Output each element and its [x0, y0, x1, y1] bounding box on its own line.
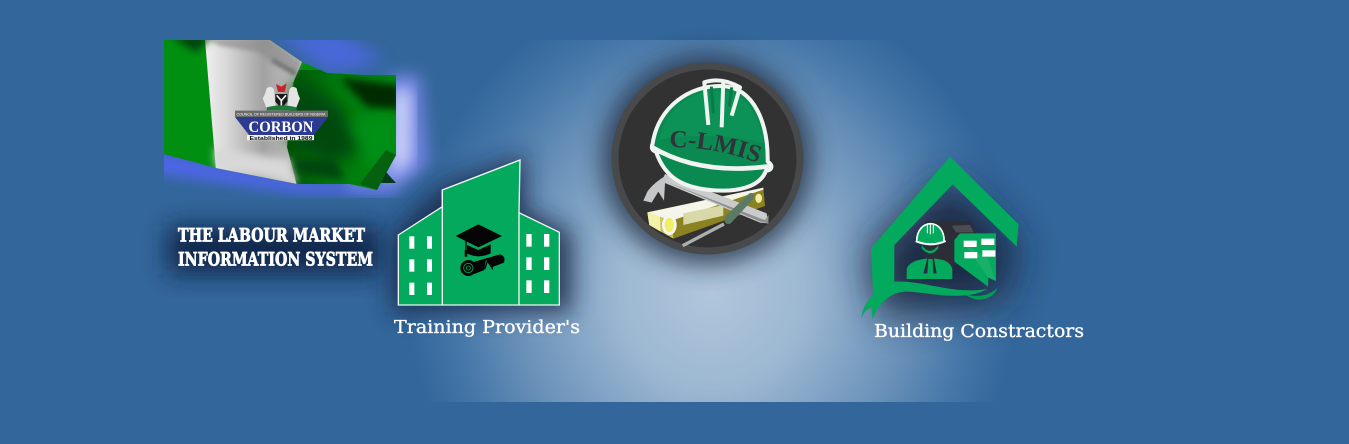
icon: worker in hard hat — [907, 224, 952, 279]
badge inner disc — [618, 70, 796, 248]
right wing windows — [526, 234, 549, 293]
CORBON logo — [235, 83, 328, 142]
house shadow — [866, 175, 1020, 315]
helmet — [650, 78, 774, 193]
icon: graduation cap — [456, 224, 502, 257]
chisel — [683, 193, 754, 246]
spirit level — [647, 188, 765, 239]
infographic canvas — [153, 40, 1084, 402]
logo wordmark: CORBON — [248, 119, 314, 136]
heading line 2: INFORMATION SYSTEM — [178, 248, 373, 270]
small green building — [954, 233, 996, 287]
roof outline — [871, 157, 1019, 302]
established strip — [247, 135, 314, 140]
helmet brim band — [651, 147, 771, 169]
flag cloth — [164, 36, 404, 195]
badge ring — [612, 62, 804, 254]
helmet label: C-LMIS — [670, 131, 762, 162]
badge shadow — [601, 54, 813, 266]
logo small caption: COUNCIL OF REGISTERED BUILDERS OF NIGERIA — [236, 112, 326, 116]
established text: Established in 1989 — [250, 136, 312, 142]
heading shadow — [168, 226, 380, 274]
label: training providers: Training Provider's — [394, 318, 580, 338]
icon: diploma scroll — [460, 254, 504, 276]
left wing windows — [409, 236, 432, 295]
icon: green school building — [398, 160, 559, 305]
panel: C-LMIS badge — [585, 40, 829, 284]
helmet ridges — [704, 80, 740, 127]
coat of arms — [263, 83, 300, 110]
swoosh — [861, 282, 987, 320]
heading: the labour market information system — [168, 224, 380, 274]
flag tail — [381, 172, 396, 183]
heading line 1: THE LABOUR MARKET — [178, 224, 365, 246]
flag backdrop glow — [140, 30, 428, 194]
central radial glow panel — [400, 40, 1020, 402]
icon: helmet, hammer, level and chisel — [643, 78, 774, 247]
hammer — [643, 167, 769, 223]
label: building constractors: Building Constractors — [874, 322, 1084, 342]
CORBON banner — [235, 117, 328, 135]
panel: flag with CORBON logo — [140, 30, 428, 195]
panel: training providers — [392, 155, 580, 338]
panel: building constractors — [861, 157, 1084, 342]
icon: green house with worker — [861, 157, 1019, 320]
building shadow — [392, 155, 572, 312]
dark inner building — [925, 221, 976, 271]
